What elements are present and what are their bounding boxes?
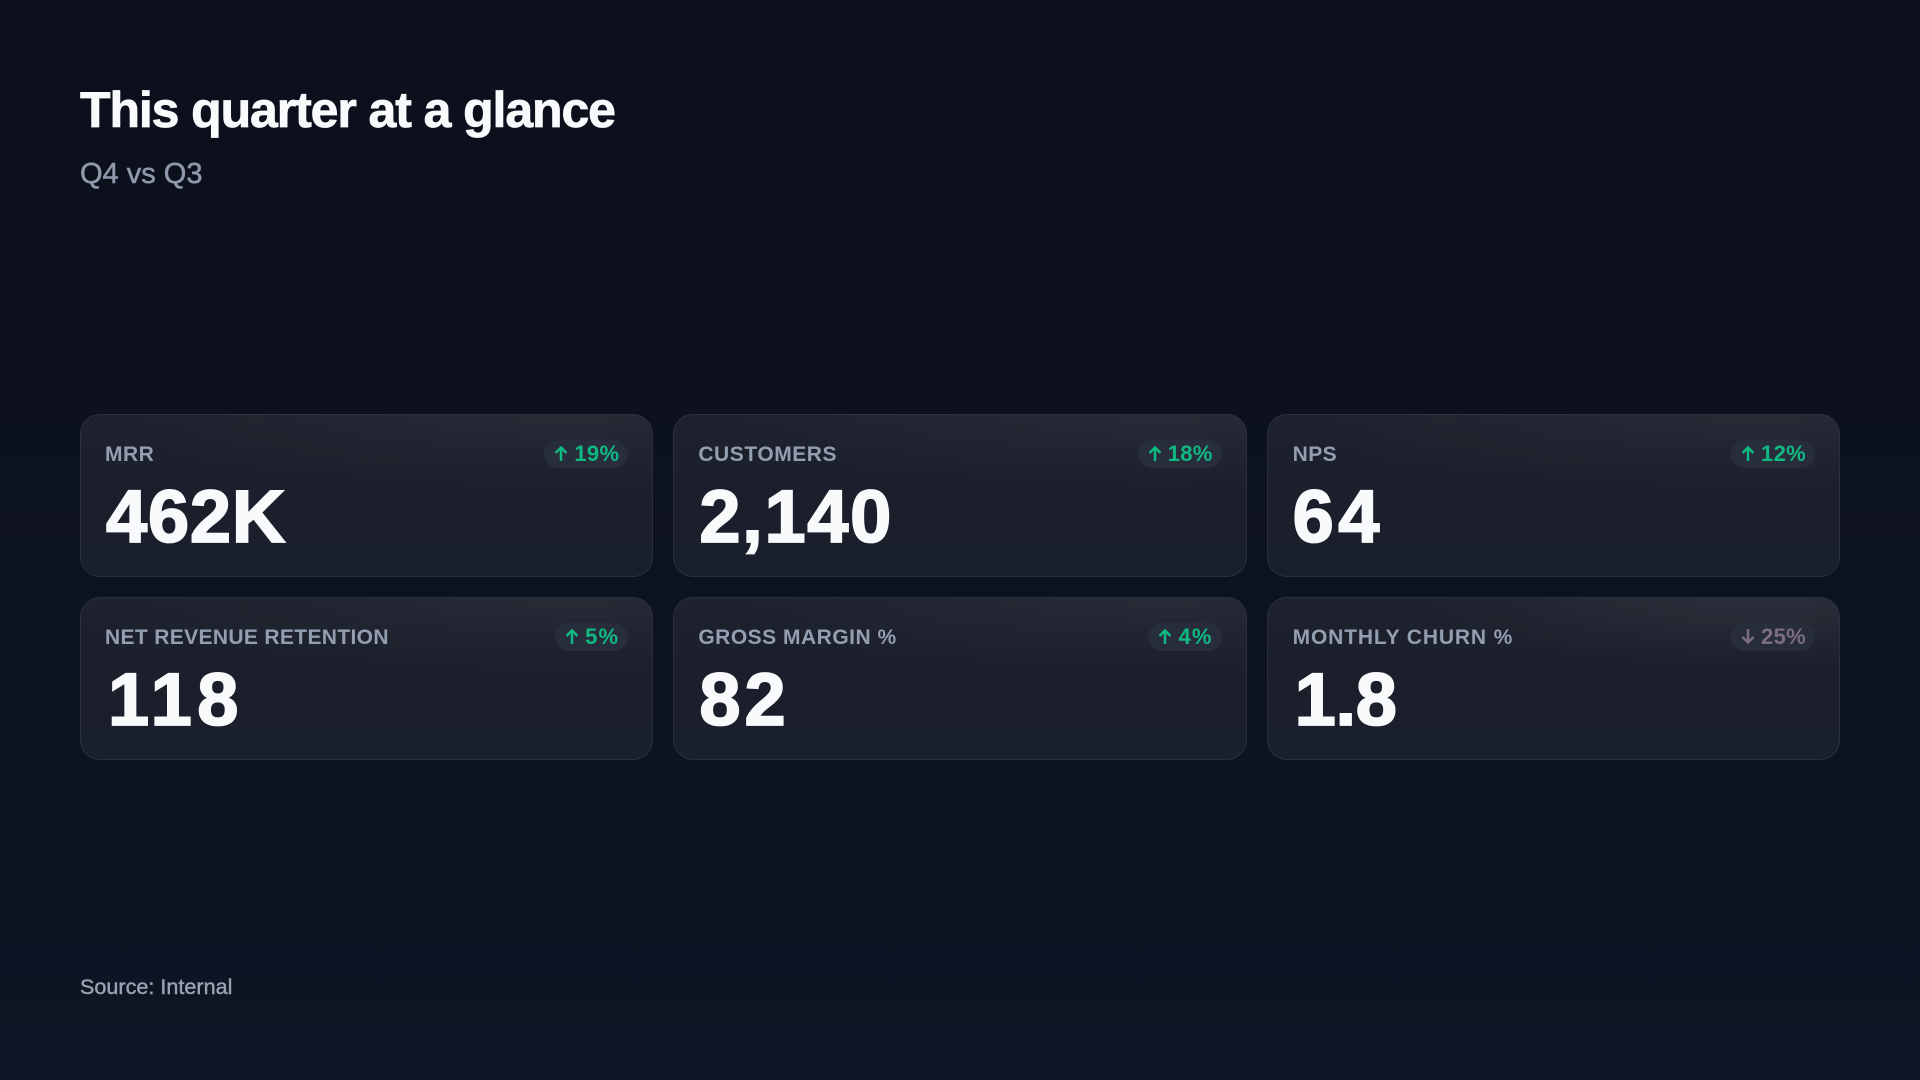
label: MRR: MRR xyxy=(105,443,154,466)
badge: up 18% xyxy=(1138,440,1222,468)
value: net revenue retention: 118 xyxy=(108,658,244,741)
value: MRR: 462K xyxy=(106,475,286,558)
label: gross margin: GROSS MARGIN % xyxy=(698,626,897,649)
panel: customers xyxy=(673,414,1247,577)
panel: NPS xyxy=(1267,414,1840,577)
panel: net revenue retention xyxy=(80,597,653,760)
subtitle: Q4 vs Q3 xyxy=(80,158,202,190)
value: monthly churn: 1.8 xyxy=(1295,658,1397,741)
value: NPS: 64 xyxy=(1293,475,1384,558)
title: This quarter at a glance xyxy=(80,82,615,138)
badge: up 19%: 19% xyxy=(574,441,619,466)
badge: up 18%: 18% xyxy=(1168,441,1213,466)
panel: MRR xyxy=(80,414,653,577)
badge: up 4%: 4% xyxy=(1178,624,1213,649)
source note: Source: Internal xyxy=(80,974,232,999)
panel: gross margin xyxy=(673,597,1247,760)
panel: monthly churn xyxy=(1267,597,1840,760)
badge: up 4% xyxy=(1148,623,1222,651)
value: gross margin: 82 xyxy=(699,658,790,741)
badge: down 25% xyxy=(1731,623,1815,651)
badge: up 5%: 5% xyxy=(585,624,619,649)
label: customers: CUSTOMERS xyxy=(698,443,837,466)
label: net revenue retention: NET REVENUE RETENTION xyxy=(105,626,389,649)
value: customers: 2,140 xyxy=(699,475,893,558)
badge: up 19% xyxy=(544,440,628,468)
badge: up 12% xyxy=(1731,440,1815,468)
label: monthly churn: MONTHLY CHURN % xyxy=(1293,626,1513,649)
badge: down 25%: 25% xyxy=(1761,624,1806,649)
badge: up 5% xyxy=(555,623,628,651)
label: NPS: NPS xyxy=(1293,443,1337,466)
badge: up 12%: 12% xyxy=(1761,441,1806,466)
